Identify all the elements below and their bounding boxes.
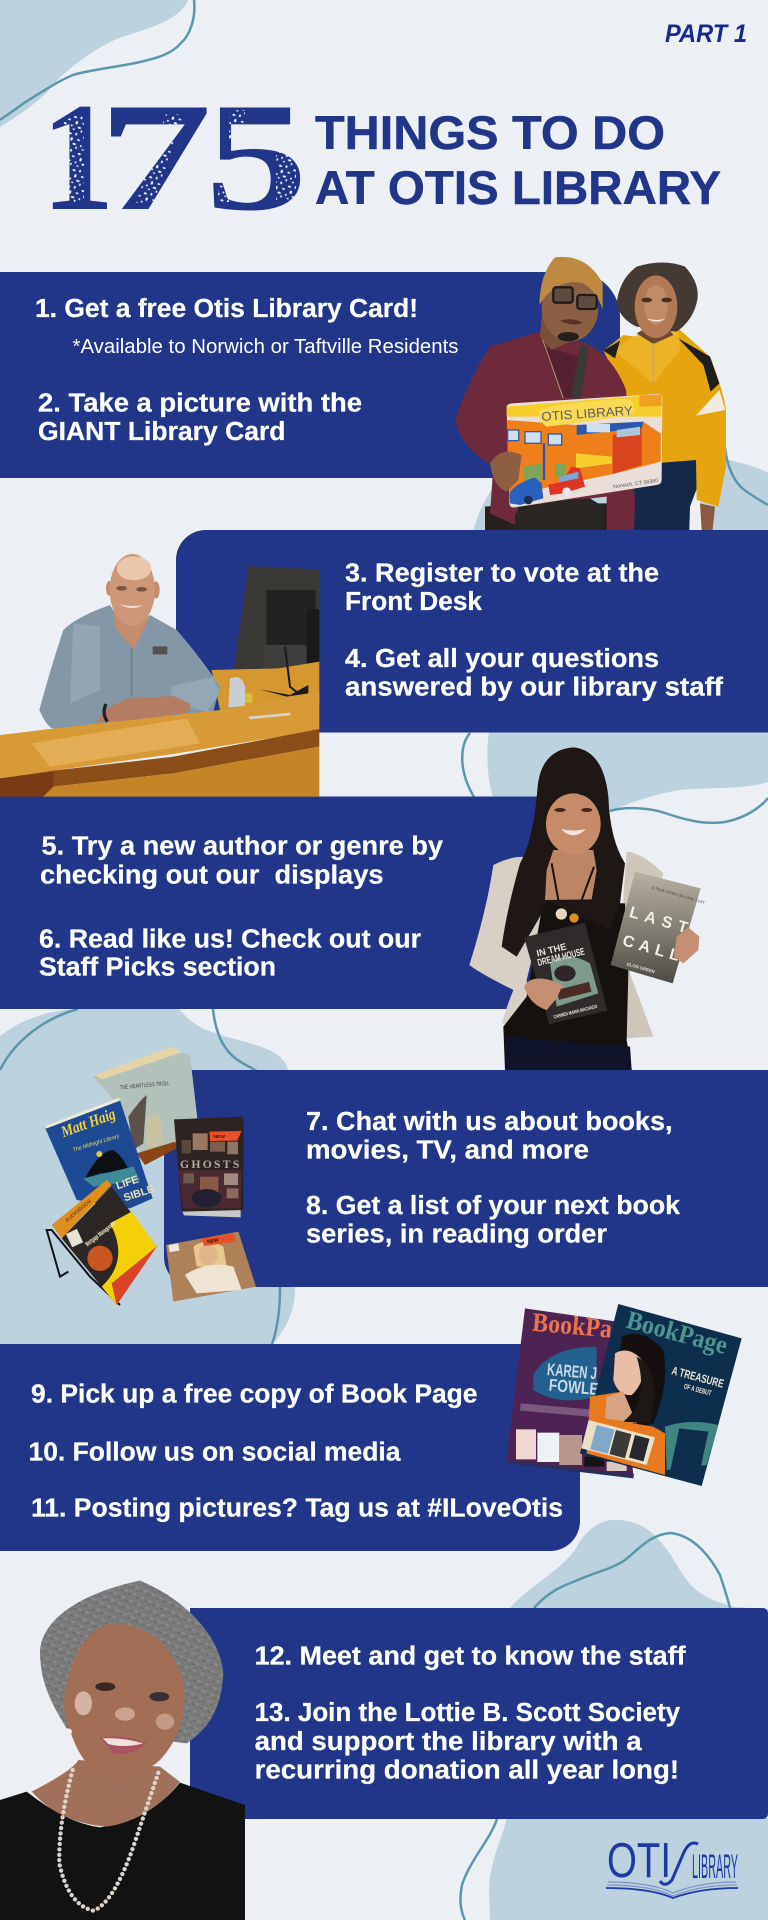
decorative blob: right of first panel [473, 448, 768, 532]
DVD: album: NEW [207, 1238, 219, 1245]
hair [40, 1581, 223, 1743]
item 13: 13. Join the Lottie B. Scott Society [255, 1699, 681, 1727]
item 9: 9. Pick up a free copy of Book Page [31, 1381, 478, 1409]
book: in the dream house: IN THE [535, 942, 567, 959]
item 1: 1. Get a free Otis Library Card! [35, 295, 418, 323]
magazine: a treasure of a debut [580, 1304, 742, 1486]
panel: items 9 to 11 [0, 1344, 580, 1551]
hand on left book [524, 978, 563, 1010]
item 3: 3. Register to vote at the [345, 559, 659, 587]
pearl necklace [59, 1770, 159, 1911]
magazine: a treasure of a debut: OF A DEBUT [683, 1382, 713, 1398]
book: last call: A TRUE STORY OF LOVE, LUST [651, 886, 706, 905]
item 4: answered by our library staff [345, 674, 724, 702]
item 8 [306, 1192, 681, 1249]
item 1 note: *Available to Norwich or Taftville Residents [72, 336, 458, 358]
item 10: 10. Follow us on social media [28, 1439, 401, 1467]
giant library card: OTIS LIBRARY [541, 404, 634, 424]
book: in the dream house [524, 923, 607, 1024]
decorative blob: left behind books [0, 1009, 296, 1344]
item 13: recurring donation all year long! [255, 1757, 679, 1785]
decorative blob: middle right [462, 732, 768, 823]
magazine: Karen Joy Fowler: FOWLE [548, 1375, 600, 1399]
book: in the dream house: DREAM HOUSE [536, 946, 586, 969]
item 7: movies, TV, and more [306, 1136, 589, 1164]
item 12: 12. Meet and get to know the staff [255, 1642, 686, 1670]
item 8: 8. Get a list of your next book [306, 1192, 681, 1220]
logo: Otis Library [606, 1834, 738, 1898]
photo: staff member at front desk [0, 554, 319, 797]
magazine: a treasure of a debut: BookPage [623, 1305, 731, 1360]
item 13 [255, 1699, 681, 1785]
DVD: album [166, 1232, 256, 1302]
DVD: ghosts: NEW [213, 1134, 225, 1140]
cars [509, 477, 543, 505]
item 7: 7. Chat with us about books, [306, 1108, 672, 1136]
item 5 [40, 833, 444, 889]
book: last call: LAST [627, 904, 690, 937]
BookPage magazines [507, 1304, 742, 1486]
magazine: Karen Joy Fowler: KAREN J [546, 1359, 598, 1383]
title text [315, 106, 721, 214]
book: the life impossible [44, 1098, 156, 1208]
book: the life impossible: SIBLE [122, 1183, 156, 1204]
title number 175: 5 [205, 72, 308, 243]
panel: items 12 and 13 [190, 1608, 768, 1819]
magazine: Karen Joy Fowler: BookPa [531, 1307, 613, 1344]
giant library card: Norwich, CT 06360 [613, 478, 659, 490]
photo: Lottie B. Scott [0, 1581, 245, 1920]
logo open book [606, 1882, 738, 1898]
panel: items 5 and 6 [0, 796, 550, 1009]
pants and top [503, 900, 632, 1070]
neck and chest [32, 1760, 180, 1827]
face and chest [545, 754, 601, 923]
item 13: and support the library with a [255, 1728, 642, 1756]
decorative blob: above last panel [509, 1520, 768, 1620]
book on wire stand: Mortgage Management [84, 1220, 118, 1248]
photo: staff member holding books [469, 747, 706, 1070]
DVD: ghosts [174, 1117, 243, 1217]
title number 175: 7 [98, 72, 212, 243]
book: last call: CALL [621, 933, 682, 965]
item 5: checking out our displays [40, 861, 384, 889]
book: the life impossible: LIFE [115, 1174, 140, 1192]
book on wire stand [47, 1180, 157, 1305]
jacket [469, 852, 663, 1038]
monitor [233, 566, 319, 693]
DVD: ghosts: GHOSTS [180, 1158, 239, 1171]
panel: items 7 and 8 [164, 1070, 768, 1287]
title text: THINGS TO DO [315, 106, 665, 159]
book: last call: ELON GREEN [626, 961, 655, 974]
magazine: Karen Joy Fowler [507, 1307, 634, 1478]
item 3: Front Desk [345, 588, 483, 616]
title number 175 [41, 71, 308, 243]
title number 175: 1 [41, 71, 115, 243]
logo stylised S [660, 1843, 698, 1884]
woman in yellow jacket [603, 262, 726, 530]
title [41, 71, 721, 243]
item 7 [306, 1108, 672, 1164]
book: last call [611, 872, 706, 983]
item 6: Staff Picks section [39, 954, 276, 982]
item 6: 6. Read like us! Check out our [39, 925, 421, 953]
item 6 [39, 925, 421, 982]
wooden desk [0, 693, 319, 797]
item 4 [345, 645, 724, 702]
man in maroon sweater [455, 257, 635, 530]
hair [502, 747, 625, 957]
item 11: 11. Posting pictures? Tag us at #ILoveOtis [31, 1495, 563, 1523]
hand on right book [674, 927, 699, 963]
staff member [39, 554, 220, 729]
item 2: GIANT Library Card [38, 418, 286, 446]
book: the heartless troll [93, 1047, 197, 1165]
book: the life impossible: The Midnight Library [72, 1133, 121, 1154]
book on wire stand: AUDIOBOOK [64, 1198, 93, 1224]
card label [539, 398, 634, 427]
panel: items 1 and 2 [0, 272, 620, 478]
desk clutter [212, 647, 319, 710]
part label: PART 1 [665, 20, 747, 48]
face [63, 1623, 185, 1779]
item 4: 4. Get all your questions [345, 645, 659, 673]
books and DVDs display [44, 1047, 256, 1305]
magazine: a treasure of a debut: A TREASURE [670, 1364, 725, 1391]
item 2: 2. Take a picture with the [38, 390, 362, 418]
item 8: series, in reading order [306, 1221, 607, 1249]
decorative blob: top left [0, 0, 194, 127]
item 3 [345, 559, 659, 616]
book: the heartless troll: THE HEARTLESS TROLL [120, 1081, 170, 1091]
title text: AT OTIS LIBRARY [315, 161, 721, 214]
item 2 [38, 390, 362, 446]
photo: two patrons with giant library card [455, 257, 726, 530]
logo letters OTI: OTI [607, 1834, 671, 1888]
item 5: 5. Try a new author or genre by [42, 833, 444, 861]
book: the life impossible: Matt Haig [58, 1106, 118, 1141]
panel: items 3 and 4 [176, 530, 768, 732]
black shirt [0, 1783, 245, 1920]
decorative blob: bottom right [461, 1818, 768, 1920]
book: in the dream house: CARMEN MARIA MACHADO [553, 1004, 598, 1021]
giant library card [490, 394, 662, 507]
